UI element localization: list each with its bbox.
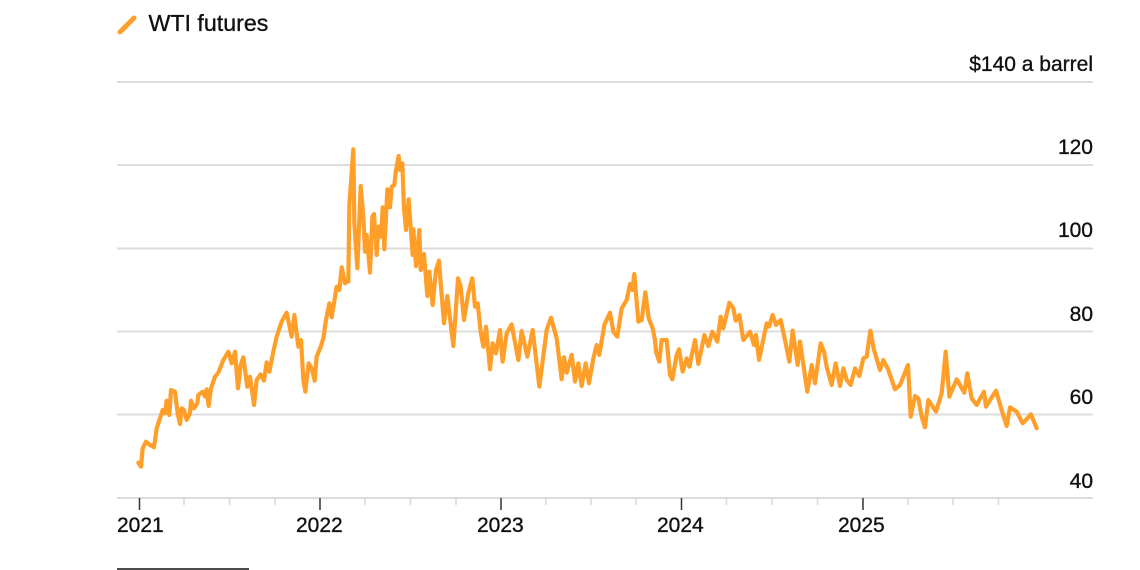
legend label: WTI futures [148, 10, 268, 36]
y-axis labels: 40 [1070, 470, 1093, 493]
footer rule [117, 568, 249, 570]
y-axis labels [969, 53, 1093, 493]
y-axis labels: 60 [1070, 386, 1093, 409]
x-axis labels: 2025 [838, 514, 885, 537]
x-axis labels [117, 514, 885, 537]
x-axis labels: 2022 [296, 514, 343, 537]
x-axis labels: 2023 [477, 514, 524, 537]
data line: WTI price 2021 to 2025 [138, 149, 1037, 467]
legend: WTI futures [120, 10, 268, 36]
icon: orange legend line [120, 18, 134, 32]
y-axis labels: 100 [1058, 219, 1093, 242]
y-axis labels: 120 [1058, 136, 1093, 159]
x-axis labels: 2021 [117, 514, 164, 537]
x-axis year ticks [140, 498, 863, 510]
y-axis labels: 80 [1070, 303, 1093, 326]
y-axis labels: $140 a barrel [969, 53, 1093, 76]
x-axis labels: 2024 [657, 514, 704, 537]
